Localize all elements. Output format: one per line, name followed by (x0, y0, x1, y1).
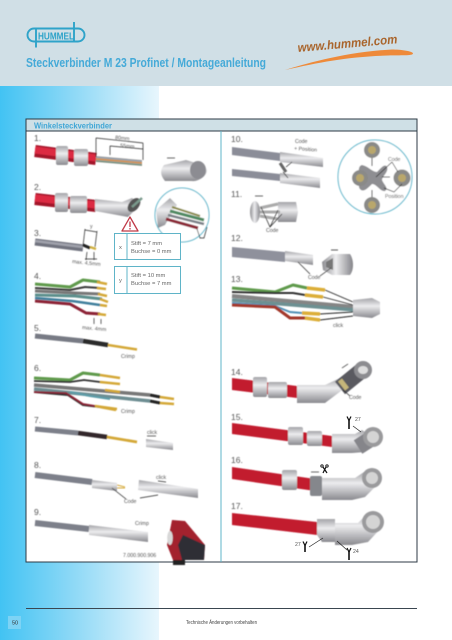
step 3: max. 4,5mm (72, 259, 101, 268)
detail circle: stripped wires (155, 188, 209, 242)
detail circle: code and position: Position (385, 194, 404, 200)
step 14 (231, 361, 372, 403)
step 4 (34, 271, 108, 333)
step 1 (34, 133, 207, 181)
step 1: 1. (34, 133, 41, 143)
step 6: 6. (34, 363, 41, 373)
step 3: y (90, 224, 93, 230)
step 4: max. 4mm (82, 325, 106, 333)
info box: x: x (119, 245, 122, 251)
info box: x: Buchse = 0 mm (131, 249, 172, 255)
info box: y: y (119, 278, 122, 284)
panel heading (26, 119, 417, 131)
step 13: click (333, 323, 343, 329)
step 3: 3. (34, 228, 41, 238)
step 7: click (147, 430, 157, 436)
step 10 (231, 134, 323, 188)
footer note: Technische Änderungen vorbehalten (186, 619, 257, 626)
step 6: Crimp (121, 409, 135, 415)
icon: scissors (321, 465, 328, 473)
step 1: 55mm (120, 143, 135, 150)
step 9: 7.000.900.906 (123, 553, 156, 559)
step 7: 7. (34, 415, 41, 425)
info box: y (114, 266, 180, 294)
step 14: 14. (231, 367, 243, 377)
step 12: 12. (231, 233, 243, 243)
info box: x: Stift = 7 mm (131, 241, 162, 247)
step 16: 16. (231, 455, 243, 465)
title: Steckverbinder M 23 Profinet / Montageanleitung (26, 56, 266, 70)
step 10: Code (295, 139, 308, 145)
website url with swoosh: www.hummel.com (297, 32, 398, 55)
step 11: 11. (231, 189, 242, 199)
panel heading: Winkelsteckverbinder (34, 120, 113, 130)
step 5: Crimp (121, 354, 135, 360)
icon: wrench 27 and 24 (295, 538, 359, 560)
step 11 (231, 189, 298, 234)
page number: 50 (12, 620, 18, 626)
info box: y: Buchse = 7 mm (131, 281, 172, 287)
step 17 (231, 501, 384, 545)
icon: wrench 27: 27 (355, 417, 361, 423)
side gradient (0, 86, 159, 640)
step 15 (231, 412, 383, 453)
logo: Hummel: HUMMEL (38, 32, 74, 42)
icon: wrench 27 and 24: 27 (295, 542, 301, 548)
step 9: Crimp (135, 521, 149, 527)
step 15: 15. (231, 412, 243, 422)
step 12 (231, 233, 353, 281)
logo: Hummel (28, 22, 84, 48)
panel: Winkelsteckverbinder (26, 119, 417, 562)
page number (8, 616, 21, 629)
crimp tool (167, 520, 205, 565)
website url with swoosh (285, 32, 413, 70)
info box: y: Stift = 10 mm (131, 273, 165, 279)
step 4: 4. (34, 271, 41, 281)
step 2: 2. (34, 182, 41, 192)
step 5 (34, 323, 137, 360)
step 13 (231, 274, 380, 329)
detail circle: code and position (338, 140, 412, 214)
step 8: Code (124, 499, 137, 505)
step 10: + Position (294, 146, 317, 154)
header band (0, 0, 452, 86)
step 3 (34, 224, 101, 268)
step 11: Code (266, 228, 279, 234)
step 6 (34, 363, 174, 415)
warning triangle (122, 217, 138, 231)
step 2 (34, 182, 143, 217)
step 8: click (156, 475, 166, 481)
step 9: 9. (34, 507, 41, 517)
detail circle: code and position: Code (388, 157, 401, 163)
step 8: 8. (34, 460, 41, 470)
step 9 (34, 507, 156, 559)
icon: wrench 27 (347, 416, 361, 432)
step 12: Code (308, 275, 321, 281)
step 5: 5. (34, 323, 41, 333)
step 16 (231, 455, 382, 500)
step 8 (34, 460, 198, 505)
step 1: 80mm (115, 135, 130, 142)
step 10: 10. (231, 134, 243, 144)
info box: x (114, 234, 180, 260)
step 13: 13. (231, 274, 243, 284)
step 14: Code (349, 395, 362, 401)
step 7 (34, 415, 173, 450)
footer rule (26, 608, 417, 609)
icon: wrench 27 and 24: 24 (353, 549, 359, 555)
step 17: 17. (231, 501, 243, 511)
